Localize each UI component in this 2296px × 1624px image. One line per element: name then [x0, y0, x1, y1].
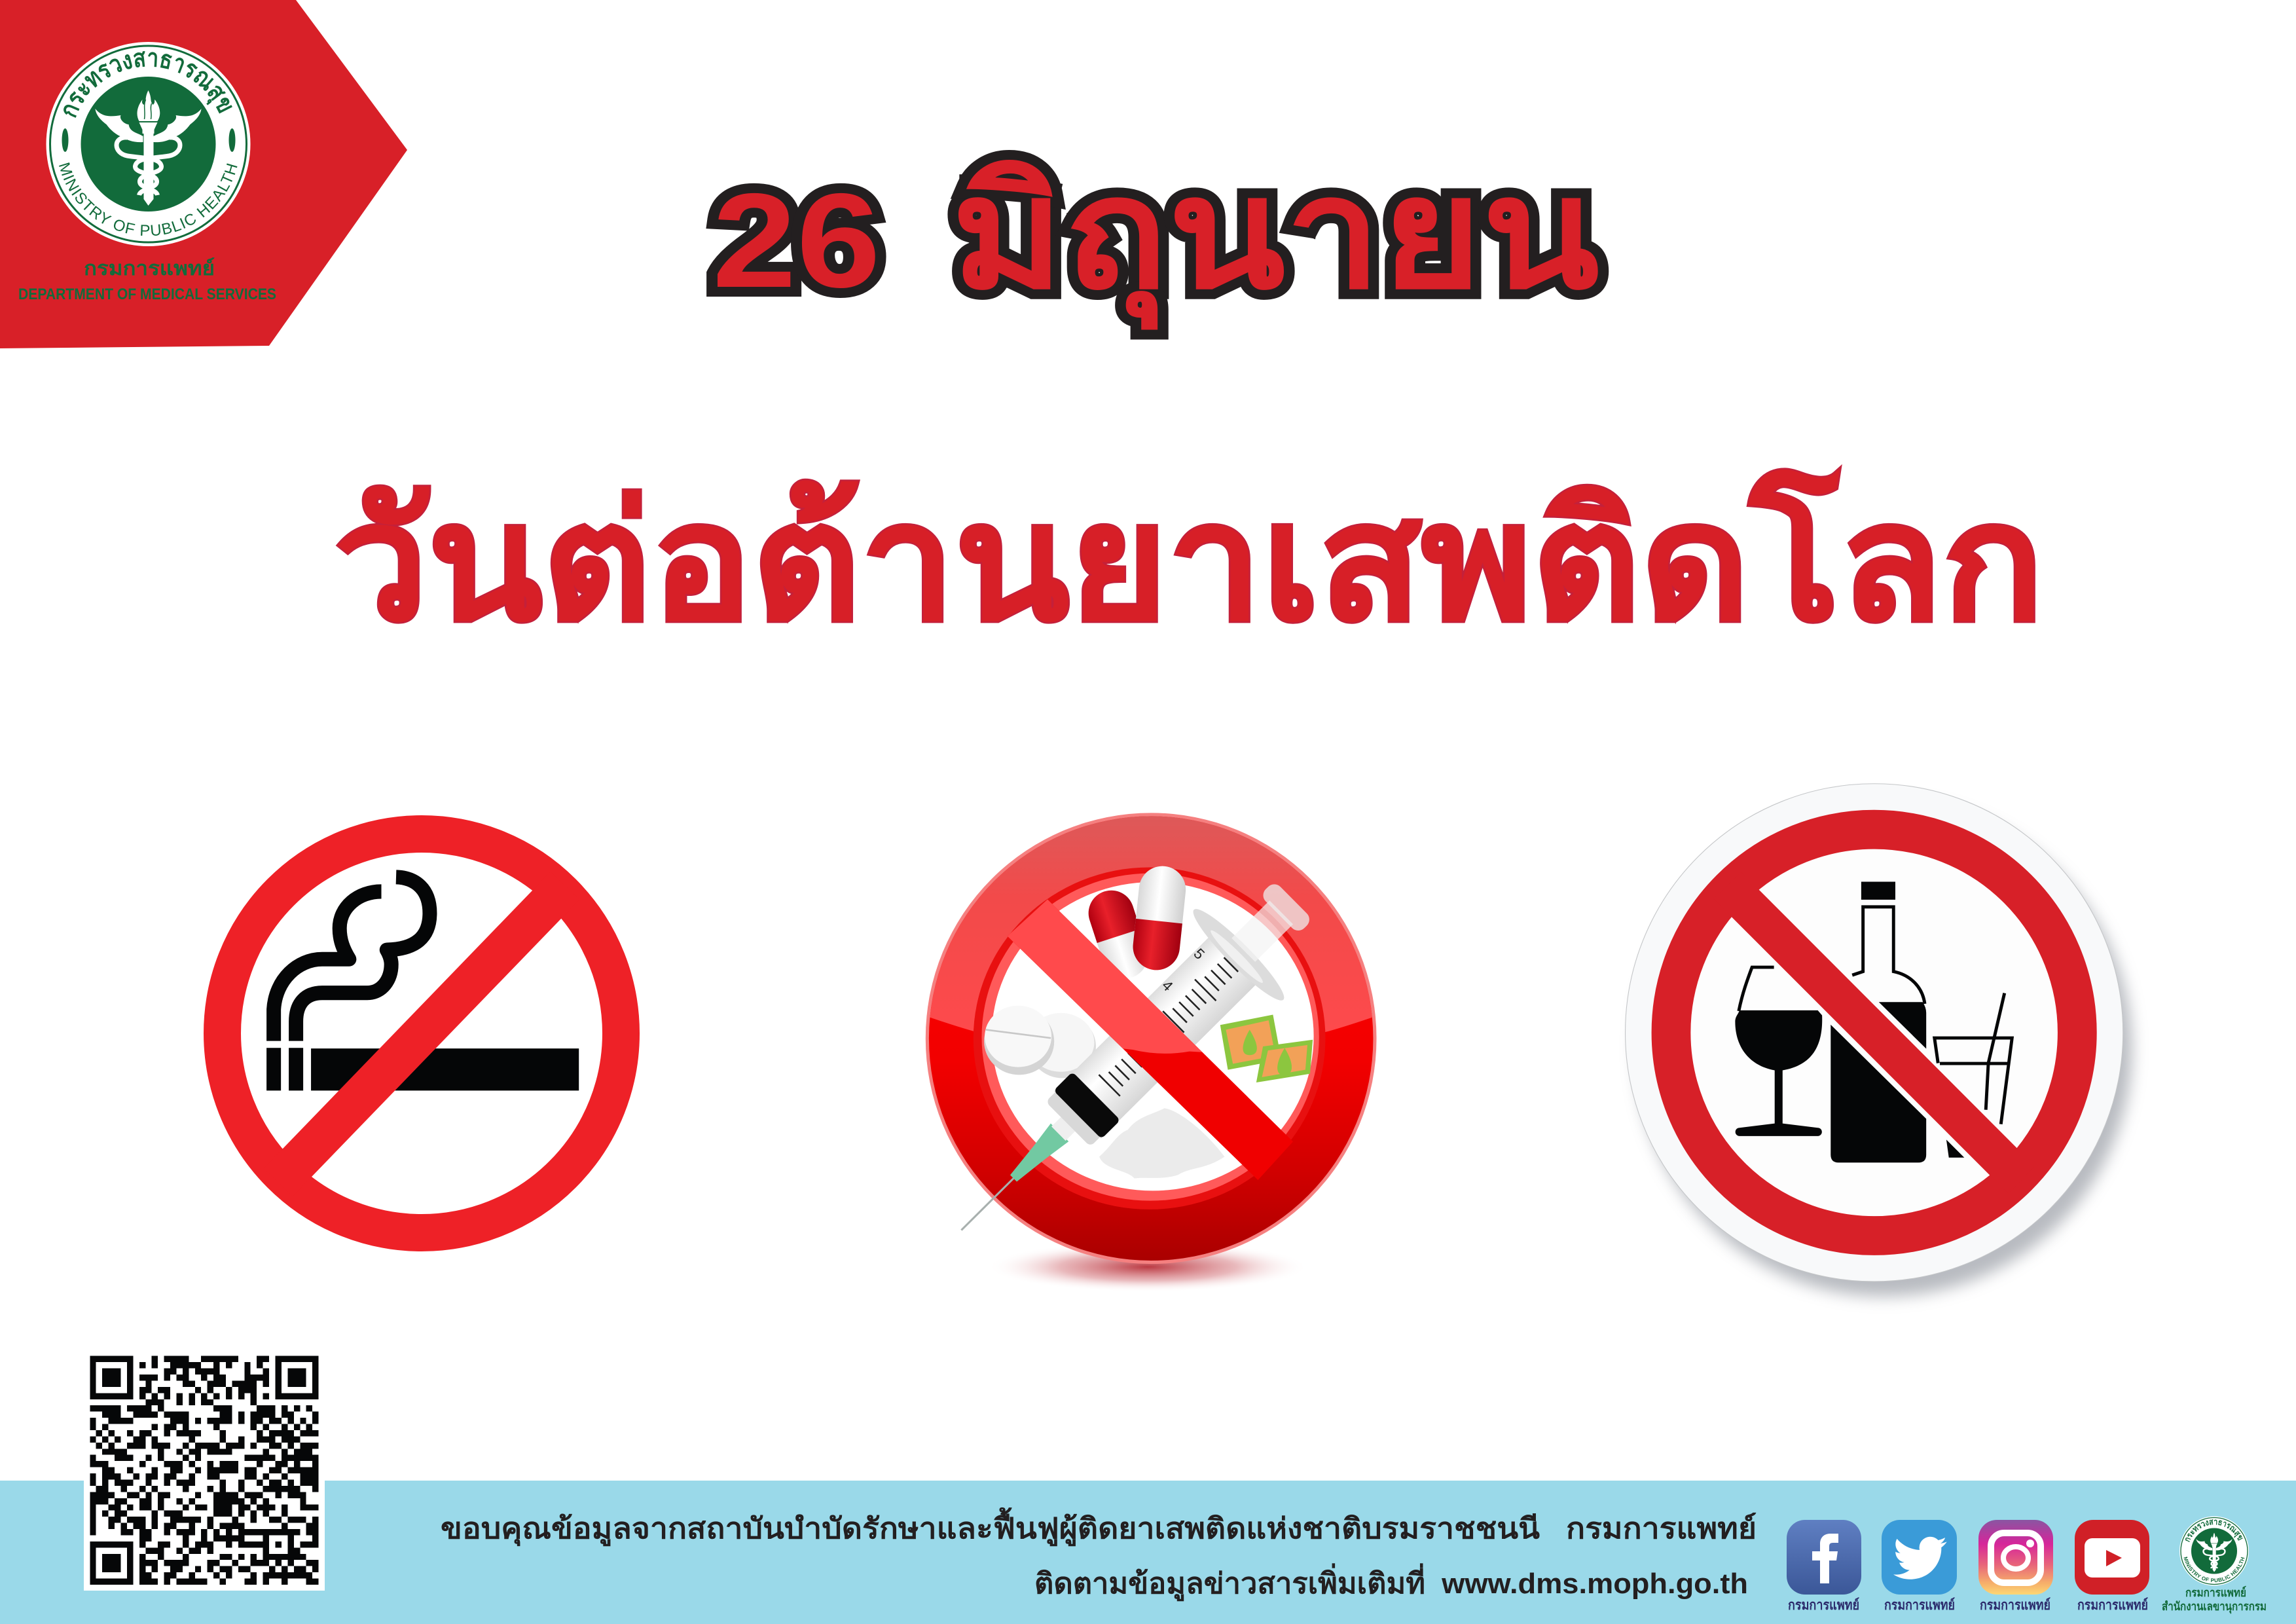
title: date [712, 147, 1599, 330]
title: World Drug Day: วันต่อต้านยาเสพติดโลก [334, 468, 2044, 654]
logo: small ministry emblem with secretariat label [2162, 1517, 2267, 1614]
prohibition ring and bar [1671, 830, 2077, 1236]
sticker disc [1626, 784, 2123, 1282]
month name: มิถุนายน [951, 147, 1599, 330]
blotter stamps [1220, 1014, 1313, 1082]
Twitter label: กรมการแพทย์ [1884, 1597, 1955, 1613]
syringe [917, 855, 1338, 1275]
sign shadow [987, 1242, 1308, 1292]
header: red arrow banner with logo [0, 0, 407, 348]
icon: no smoking sign [223, 834, 621, 1232]
small emblem label line 2: สำนักงานเลขานุการกรม [2162, 1600, 2267, 1614]
drinking glass with straw [1935, 993, 2012, 1158]
logo: small ministry emblem with secretariat label: MINISTRY OF PUBLIC HEALTH [2183, 1557, 2244, 1582]
footer band [0, 1481, 2296, 1624]
icon: no alcohol sign [1626, 784, 2132, 1297]
bottle [1831, 881, 1926, 1162]
credit text line 1: ขอบคุณข้อมูลจากสถาบันบำบัดรักษาและฟื้นฟูผู้ติดยาเสพติดแห่งชาติบรมราชชนนี กรมการแพทย์ [441, 1507, 1757, 1547]
department name English: DEPARTMENT OF MEDICAL SERVICES [18, 286, 276, 303]
icon: Facebook [1787, 1520, 1861, 1613]
capsule red and white [1083, 885, 1154, 984]
date number: 26 [712, 166, 881, 316]
sticker shadow [1637, 801, 2132, 1297]
capsule white and red [1131, 864, 1188, 972]
icon: no drugs sign [917, 786, 1385, 1292]
syringe scale number 5: 5 [1190, 946, 1208, 963]
logo: Ministry of Public Health emblem [46, 42, 250, 246]
icon: Instagram [1978, 1520, 2053, 1613]
small emblem label line 1: กรมการแพทย์ [2185, 1585, 2246, 1599]
red ring [917, 786, 1385, 1264]
icon: Twitter [1882, 1520, 1957, 1613]
logo: small ministry emblem with secretariat label: กระทรวงสาธารณสุข [2185, 1519, 2243, 1542]
prohibition bar [1007, 900, 1293, 1180]
syringe scale number 4: 4 [1159, 977, 1176, 994]
logo: Ministry of Public Health emblem: MINISTRY OF PUBLIC HEALTH [59, 162, 237, 236]
tablets [984, 1006, 1096, 1078]
inner white face [1687, 846, 2061, 1219]
powder pile [1099, 1108, 1224, 1178]
wine glass [1735, 967, 1822, 1136]
icon: YouTube [2075, 1520, 2149, 1613]
Instagram label: กรมการแพทย์ [1980, 1597, 2050, 1613]
credit text line 2 with website: ติดตามข้อมูลข่าวสารเพิ่มเติมที่ www.dms.moph.go.th [1034, 1563, 1748, 1601]
YouTube label: กรมการแพทย์ [2077, 1597, 2148, 1613]
logo: Ministry of Public Health emblem: กระทรวงสาธารณสุข [64, 51, 232, 118]
department name Thai: กรมการแพทย์ [84, 257, 215, 280]
Facebook label: กรมการแพทย์ [1788, 1597, 1859, 1613]
QR code [84, 1350, 325, 1591]
